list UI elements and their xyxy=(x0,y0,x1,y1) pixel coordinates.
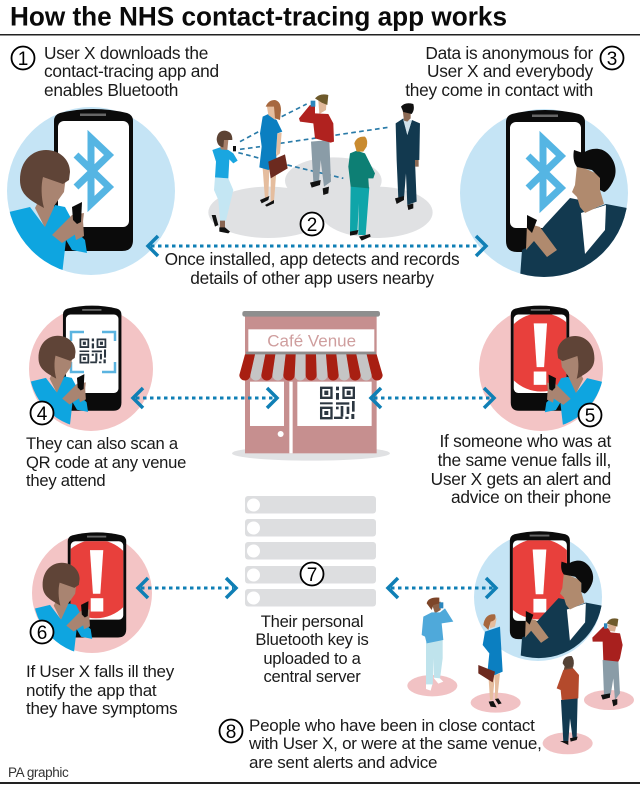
illustration: group of app users with dashed links xyxy=(208,94,433,241)
person: woman using phone xyxy=(212,131,238,233)
arrow: shop to phone xyxy=(371,388,494,408)
illustration: woman receiving alert xyxy=(479,306,609,431)
step 5 text: advice on their phone xyxy=(451,487,611,507)
step 7 text: uploaded to a xyxy=(263,649,362,668)
step 8 text: People who have been in close contact xyxy=(249,716,535,735)
step 3 text: Data is anonymous for xyxy=(425,43,593,63)
step 1 number xyxy=(12,46,34,70)
illustration: man receiving alert xyxy=(474,531,602,661)
step 2 text: details of other app users nearby xyxy=(190,268,434,288)
step 5 text: the same venue falls ill, xyxy=(438,450,611,470)
step 6 number xyxy=(30,620,54,644)
step 7 number: 7 xyxy=(307,565,317,586)
illustration: central server list xyxy=(245,496,376,606)
step 4 number: 4 xyxy=(37,404,48,425)
illustration: man with phone showing Bluetooth xyxy=(460,109,628,278)
step 8 text: with User X, or were at the same venue, xyxy=(248,734,542,753)
step 7 text: Their personal xyxy=(261,612,363,631)
step 5 text: User X gets an alert and xyxy=(431,469,611,489)
step 4 number xyxy=(30,402,54,425)
person: man on phone in red jumper xyxy=(299,94,334,195)
step 1 text: enables Bluetooth xyxy=(44,80,178,100)
step 6 number: 6 xyxy=(37,623,47,644)
step 5 text: If someone who was at xyxy=(440,431,611,451)
step 4 text: They can also scan a xyxy=(26,434,179,453)
person: man in green seen from behind xyxy=(348,137,375,241)
step 2 text: Once installed, app detects and records xyxy=(165,249,460,269)
step 5 number: 5 xyxy=(585,406,595,427)
awning xyxy=(239,354,383,381)
illustration: woman with phone showing Bluetooth xyxy=(0,107,175,275)
arrow: between users, step 2 xyxy=(148,236,486,256)
step 3 text: User X and everybody xyxy=(427,61,594,81)
person: man in dark suit xyxy=(395,103,420,210)
step 1 number: 1 xyxy=(18,49,28,70)
step 4 text: they attend xyxy=(26,471,105,490)
credit: PA graphic xyxy=(8,765,69,780)
illustration: cafe venue shop front xyxy=(232,311,390,461)
arrow: phone to server xyxy=(138,578,236,598)
step 3 number: 3 xyxy=(607,49,617,70)
person: man in blue on phone xyxy=(422,598,453,691)
QR code in shop window xyxy=(320,387,355,419)
person: man seen from behind xyxy=(557,656,579,745)
person: woman with briefcase xyxy=(478,614,503,707)
step 5 number xyxy=(578,404,602,427)
step 3 number xyxy=(600,46,624,70)
step 7 text: central server xyxy=(263,667,361,686)
step 2 number: 2 xyxy=(307,215,317,236)
step 8 number: 8 xyxy=(226,722,236,743)
step 2 number xyxy=(300,212,324,236)
arrow: server to contacts xyxy=(388,578,496,598)
step 3 text: they come in contact with xyxy=(405,80,593,100)
shop sign text: Café Venue xyxy=(267,331,356,350)
step 4 text: QR code at any venue xyxy=(26,453,186,472)
step 7 number xyxy=(300,562,324,586)
step 8 number xyxy=(220,720,242,743)
step 1 text: contact-tracing app and xyxy=(44,61,219,81)
arrow: phone to shop xyxy=(133,388,277,408)
illustration: contacts receiving alerts xyxy=(407,598,634,754)
step 6 text: they have symptoms xyxy=(26,699,177,718)
illustration: woman notifying app of symptoms xyxy=(28,532,152,655)
step 6 text: notify the app that xyxy=(26,681,157,700)
person: woman with briefcase xyxy=(259,100,288,207)
illustration: woman scanning QR code xyxy=(24,306,153,431)
title: How the NHS contact-tracing app works xyxy=(10,2,507,32)
person: man in red on phone xyxy=(592,618,623,706)
step 1 text: User X downloads the xyxy=(44,43,208,63)
step 7 text: Bluetooth key is xyxy=(255,630,369,649)
step 8 text: are sent alerts and advice xyxy=(249,753,437,772)
step 6 text: If User X falls ill they xyxy=(26,662,175,681)
